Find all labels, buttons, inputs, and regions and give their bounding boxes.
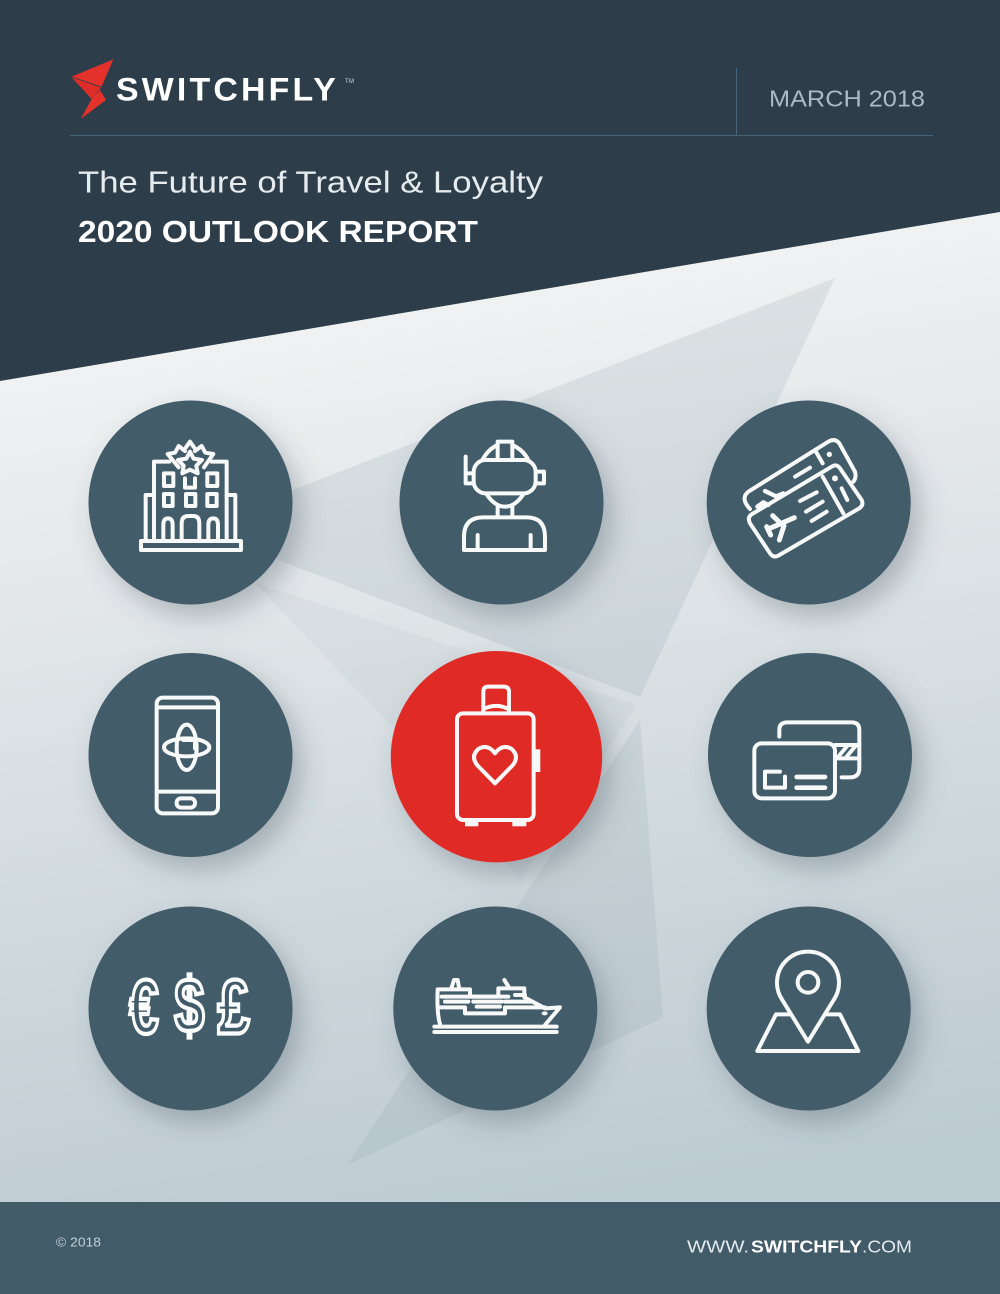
- date: MARCH 2018: [769, 86, 925, 112]
- circle: currencies: [88, 906, 292, 1110]
- icon: euro, dollar and pound symbols: £: [218, 964, 250, 1050]
- icon: plane tickets: [745, 440, 862, 557]
- circle: cruise ship: [393, 906, 597, 1110]
- circle: map pin: [707, 906, 911, 1110]
- logo wordmark: SWITCHFLY: [116, 72, 339, 108]
- icon: cruise ship: [434, 980, 560, 1032]
- logo: [72, 59, 354, 119]
- header rules: [70, 68, 933, 136]
- icon: map with location pin: [757, 952, 858, 1051]
- title line: The Future of Travel & Loyalty: [78, 166, 544, 200]
- website: WWW.: [687, 1237, 749, 1257]
- icon: credit cards: [754, 722, 859, 798]
- website: SWITCHFLY: [751, 1237, 862, 1257]
- logo mark: [72, 59, 113, 119]
- website: [687, 1237, 912, 1257]
- background paper plane: [255, 278, 835, 1165]
- circle: mobile AR: [88, 653, 292, 857]
- icon: hotel: [141, 442, 241, 550]
- icon: euro, dollar and pound symbols: $: [174, 963, 204, 1049]
- icon: euro, dollar and pound symbols: €: [129, 964, 159, 1050]
- report heading: 2020 OUTLOOK REPORT: [78, 214, 478, 249]
- circle: credit cards: [708, 653, 912, 857]
- copyright: © 2018: [56, 1236, 101, 1250]
- website: .COM: [862, 1237, 912, 1257]
- icon: suitcase with heart: [457, 687, 540, 826]
- footer band: [0, 1202, 1000, 1294]
- circle: VR headset: [400, 400, 604, 604]
- trademark: TM: [345, 79, 354, 85]
- icon: person with VR headset: [464, 442, 545, 550]
- circle: tickets: [707, 400, 911, 604]
- icon: euro, dollar and pound symbols: [129, 963, 250, 1050]
- circle: luggage, highlighted: [391, 651, 602, 862]
- header band: [0, 0, 1000, 381]
- circle: hotel: [88, 400, 292, 604]
- icon: smartphone with orbit: [157, 698, 218, 813]
